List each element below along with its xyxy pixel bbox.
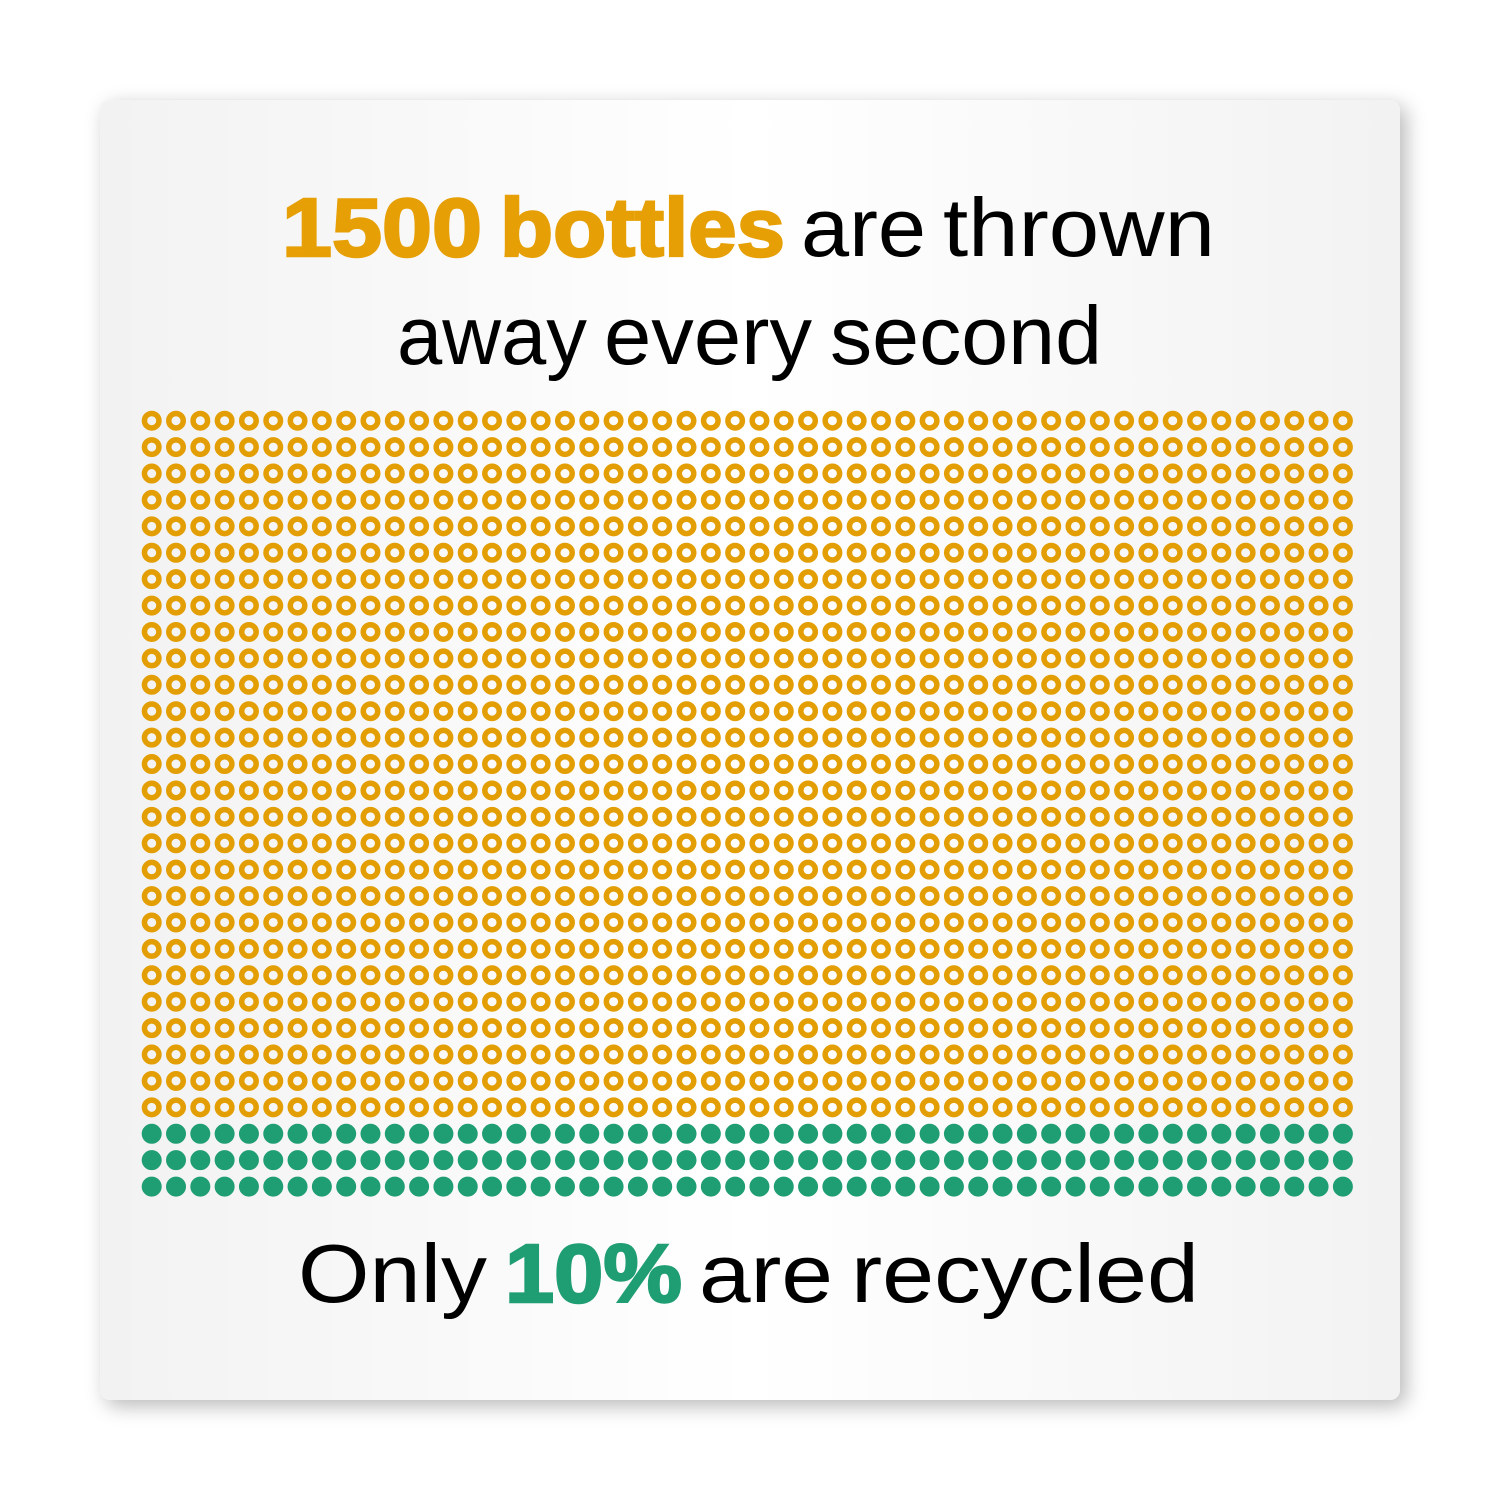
caption: Only 10% are recycled: Only [298,1227,488,1320]
title: 1500 bottles are thrown away every second: bottles [500,181,785,274]
title: 1500 bottles are thrown away every second: 1500 [282,181,482,274]
title: 1500 bottles are thrown away every second: away [397,289,587,382]
title: 1500 bottles are thrown away every second: every [604,289,813,382]
caption: Only 10% are recycled: recycled [851,1227,1199,1320]
title: 1500 bottles are thrown away every second: second [830,289,1102,382]
caption: Only 10% are recycled: are [699,1227,833,1320]
title: 1500 bottles are thrown away every second: are [801,181,926,274]
title: 1500 bottles are thrown away every second [282,181,1215,382]
chart: green dots, 3 rows of 50 bottles recycled [144,1127,1350,1194]
title: 1500 bottles are thrown away every second: thrown [943,181,1215,274]
caption: Only 10% are recycled [298,1227,1199,1320]
caption: Only 10% are recycled: 10% [505,1227,682,1320]
chart: orange rings, 27 rows of 50 bottles thrown away [144,413,1350,1115]
panel: card background [100,100,1400,1400]
